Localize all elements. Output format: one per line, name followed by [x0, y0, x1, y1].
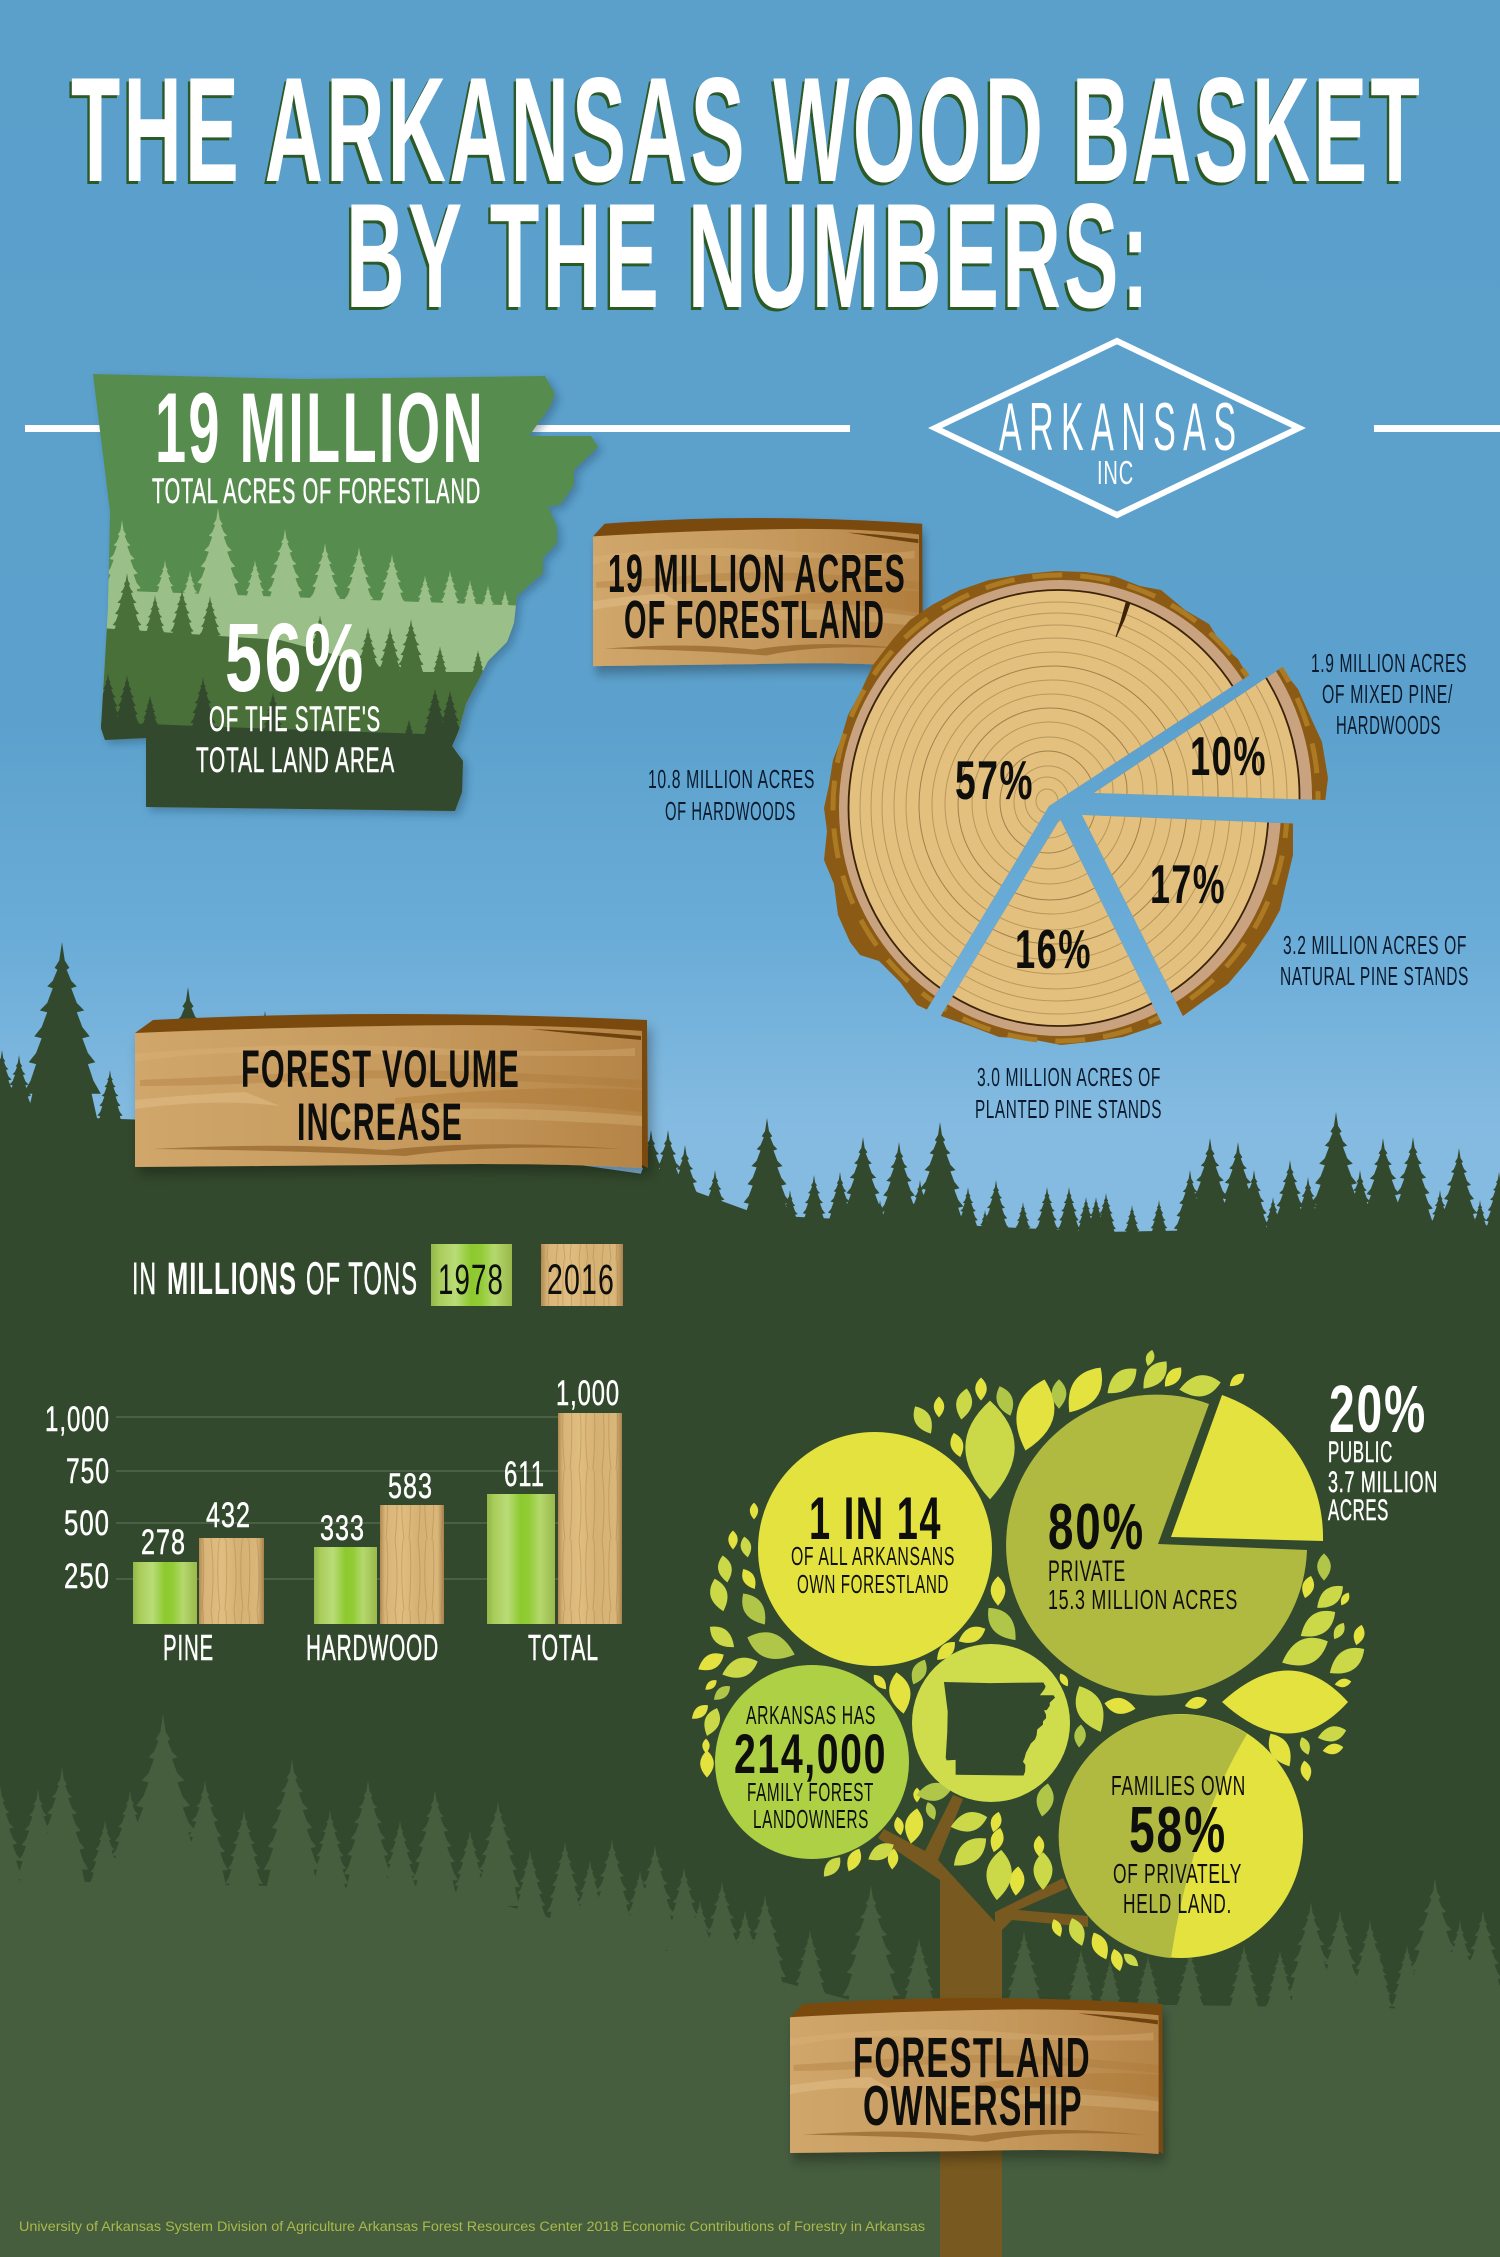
tree trunk and branches — [878, 1795, 1088, 2257]
bar value labels: 278 — [141, 1523, 186, 1562]
circle: 214,000 landowners: FAMILY FOREST — [747, 1777, 874, 1807]
pie percent labels: 17% — [1150, 853, 1226, 915]
callout: 20 percent public: 20% — [1329, 1372, 1427, 1447]
wood sign: forest volume increase — [135, 1014, 648, 1168]
logo: Arkansas Inc diamond — [935, 341, 1299, 515]
wedge 57 percent — [824, 571, 1250, 1010]
circle: families own 58 percent: HELD LAND. — [1123, 1888, 1232, 1919]
pie label: planted pine — [975, 1062, 1162, 1124]
pie percent labels — [955, 725, 1267, 980]
wedge 10 percent — [1094, 666, 1328, 800]
wood sign: forest volume increase: INCREASE — [297, 1093, 463, 1152]
pie percent labels: 10% — [1190, 725, 1267, 787]
dark forest silhouette — [0, 942, 1500, 2257]
callout: 20 percent public — [1328, 1372, 1438, 1527]
legend swatch 1978: 1978 — [438, 1256, 504, 1304]
y axis labels: 750 — [66, 1452, 110, 1491]
pie label: hardwoods: OF HARDWOODS — [665, 796, 796, 826]
wood sign: 19 million acres: OF FORESTLAND — [624, 590, 885, 650]
circle: 214,000 landowners: ARKANSAS HAS — [746, 1700, 876, 1730]
circle: 214,000 landowners — [715, 1665, 909, 1859]
state stat: 56 percent — [196, 603, 395, 780]
bar value labels: 432 — [206, 1496, 251, 1535]
pie: private vs public ownership — [1006, 1395, 1323, 1696]
bar value labels: 583 — [388, 1467, 433, 1506]
circle: 1 in 14 — [758, 1432, 992, 1666]
legend swatch 1978 — [431, 1244, 512, 1306]
slice: private 80 percent: 15.3 MILLION ACRES — [1048, 1584, 1238, 1615]
tree leaves — [689, 1349, 1370, 1973]
slice: private 80 percent — [1006, 1395, 1307, 1696]
circle: 1 in 14: OF ALL ARKANSANS — [791, 1541, 955, 1571]
pie label: hardwoods — [648, 764, 815, 826]
state stat: 56 percent: TOTAL LAND AREA — [196, 741, 395, 780]
slice: private 80 percent: PRIVATE — [1048, 1555, 1126, 1588]
slice: private 80 percent: 80% — [1048, 1490, 1145, 1563]
legend — [132, 1244, 623, 1306]
pie label: mixed pine — [1311, 648, 1467, 740]
bar chart: forest volume — [45, 1374, 622, 1668]
wedge 17 percent — [1082, 815, 1293, 1016]
wood sign: forestland ownership — [790, 1998, 1163, 2154]
callout: 20 percent public: ACRES — [1328, 1494, 1389, 1527]
pie percent labels: 57% — [955, 749, 1034, 811]
circle: 1 in 14: 1 IN 14 — [809, 1485, 942, 1552]
state stat: 19 million: TOTAL ACRES OF FORESTLAND — [152, 472, 481, 511]
wood sign: forestland ownership: FORESTLAND — [853, 2026, 1091, 2090]
white rule lines — [25, 425, 1500, 432]
title — [71, 46, 1423, 339]
layered forest in state — [101, 508, 516, 811]
wood sign: 19 million acres — [593, 518, 923, 667]
legend: IN — [132, 1253, 157, 1304]
legend: MILLIONS — [167, 1253, 297, 1304]
circle: families own 58 percent: 58% — [1129, 1793, 1227, 1866]
slice: public 20 percent — [1171, 1395, 1323, 1541]
legend swatch 2016 — [541, 1244, 623, 1306]
circle: families own 58 percent — [1059, 1714, 1303, 1958]
circle: 1 in 14: OWN FORESTLAND — [797, 1569, 949, 1599]
category labels: PINE — [163, 1627, 214, 1668]
category labels — [163, 1627, 599, 1668]
circle: Arkansas state icon — [912, 1644, 1070, 1802]
wood sign: 19 million acres: 19 MILLION ACRES — [608, 544, 906, 604]
state stat: 56 percent: OF THE STATE'S — [209, 700, 381, 739]
panel: Arkansas state map — [93, 372, 598, 830]
pie chart: tree cross-section — [824, 559, 1328, 1045]
state base shape — [93, 374, 598, 811]
pie label: planted pine: 3.0 MILLION ACRES OF — [977, 1062, 1161, 1092]
bar value labels: 333 — [320, 1509, 365, 1548]
pie percent labels: 16% — [1015, 918, 1092, 980]
bar value labels — [141, 1374, 620, 1562]
wedge 16 percent — [940, 819, 1162, 1045]
pie label: planted pine: PLANTED PINE STANDS — [975, 1094, 1162, 1124]
pie label: hardwoods: 10.8 MILLION ACRES — [648, 764, 815, 794]
source footer: University of Arkansas System Division of Agriculture Arkansas Forest Resources Center 2018 Economic Contributions of Forestry in Arkansas — [19, 2219, 925, 2234]
state stat: 19 million: 19 MILLION — [155, 372, 485, 483]
bar value labels: 611 — [504, 1455, 545, 1494]
circle: families own 58 percent: FAMILIES OWN — [1111, 1770, 1246, 1801]
y axis labels: 250 — [64, 1557, 110, 1596]
y axis labels — [45, 1400, 110, 1596]
y axis labels: 1,000 — [45, 1400, 110, 1439]
bar value labels: 1,000 — [556, 1374, 620, 1413]
legend: OF TONS — [306, 1253, 418, 1304]
callout: 20 percent public: PUBLIC — [1328, 1436, 1393, 1469]
circle: 214,000 landowners: LANDOWNERS — [753, 1804, 869, 1834]
circle: 214,000 landowners: 214,000 — [734, 1722, 887, 1785]
wood sign: forestland ownership: OWNERSHIP — [863, 2074, 1083, 2138]
state stat: 56 percent: 56% — [225, 603, 366, 712]
bars — [133, 1413, 622, 1624]
pie label: natural pine — [1280, 930, 1469, 991]
y axis labels: 500 — [64, 1504, 110, 1543]
legend swatch 2016: 2016 — [547, 1256, 615, 1304]
state stat: 19 million — [152, 372, 485, 511]
lower lighter forest — [0, 1714, 1500, 2257]
logo: Arkansas Inc diamond: ARKANSAS — [999, 389, 1236, 465]
circle: families own 58 percent: OF PRIVATELY — [1113, 1858, 1242, 1889]
category labels: TOTAL — [528, 1627, 599, 1668]
category labels: HARDWOOD — [306, 1627, 439, 1668]
wood sign: forest volume increase: FOREST VOLUME — [241, 1040, 520, 1099]
logo: Arkansas Inc diamond: INC — [1097, 454, 1134, 491]
